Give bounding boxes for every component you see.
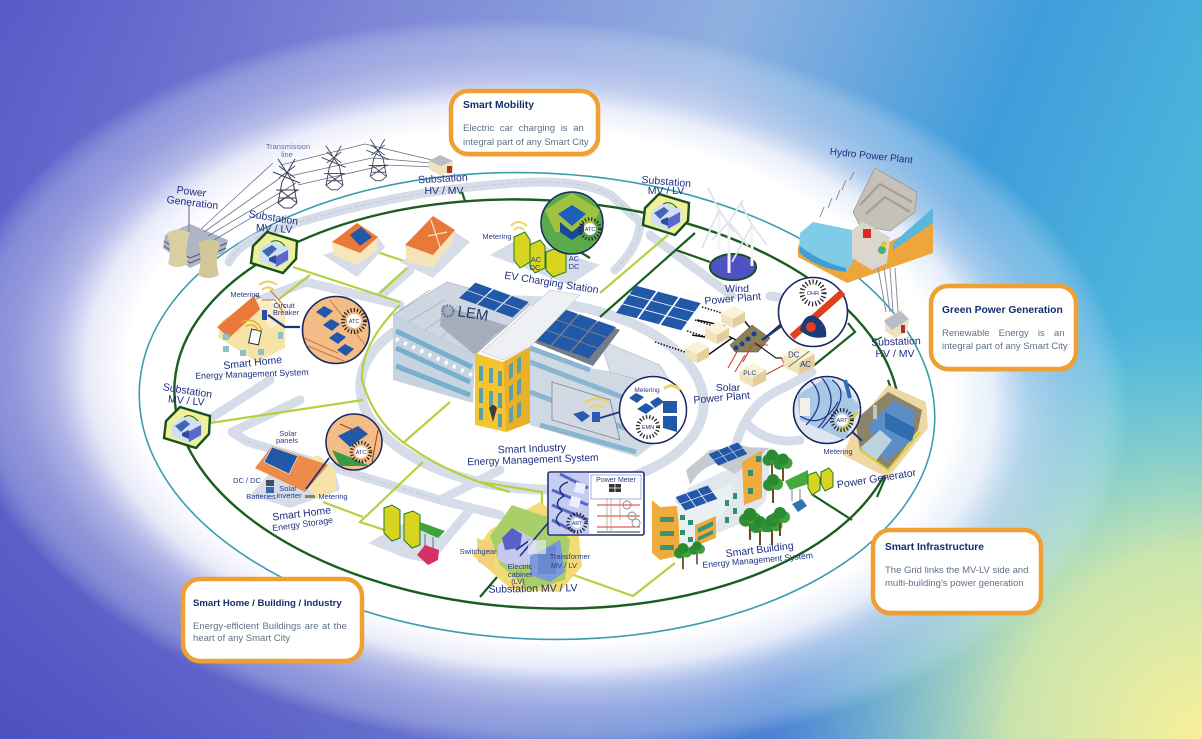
- icon: wind base: [710, 254, 756, 280]
- callout: smart home building industry: Smart Home / Building / Industry: [193, 598, 342, 609]
- label: storage parts: panels: [276, 436, 298, 445]
- left wing facade: [393, 315, 475, 403]
- label: storage parts: DC / DC: [233, 476, 262, 485]
- detail circle: ART generator: [794, 376, 860, 444]
- transmission lines and towers: [201, 139, 434, 240]
- right wing facade: [530, 345, 672, 457]
- hexagon substation top-left: [251, 232, 297, 273]
- icon: combiner box: [705, 322, 729, 344]
- roads network: [208, 182, 840, 555]
- label: metering and circuit breaker: Breaker: [273, 308, 300, 317]
- smart home EMS: [217, 282, 300, 362]
- callout: smart home building industry: [183, 579, 364, 664]
- power meter panel: [548, 472, 644, 535]
- label: EV metering and AC DC: DC: [530, 263, 541, 272]
- substation HV/MV top: [429, 155, 453, 176]
- label: substation HV/MV top: HV / MV: [424, 185, 464, 197]
- smart industry building LEM: [393, 282, 682, 457]
- callout: smart home building industry: heart of any Smart City: [193, 633, 290, 644]
- label: smart industry EMS: Energy Management System: [467, 453, 599, 468]
- label: metering and circuit breaker: [230, 290, 300, 317]
- label: substation equipment: [459, 547, 591, 586]
- medium voltage branch lines: [462, 192, 892, 597]
- label: transmission line: Transmission: [266, 142, 310, 151]
- label: substation HV/MV right: HV / MV: [875, 348, 915, 360]
- label: smart home energy storage: Energy Storage: [272, 515, 334, 533]
- label: storage parts: Metering: [318, 492, 348, 501]
- label: smart industry EMS: [467, 442, 599, 468]
- label: substation MV/LV left: Substation: [162, 381, 213, 401]
- detail circle: ATC storage: ATC: [356, 450, 366, 456]
- label: EV metering and AC DC: DC: [569, 262, 580, 271]
- wind power plant: [702, 188, 767, 280]
- solar plant wiring and boxes: [655, 306, 815, 387]
- label: storage parts: Solar: [279, 429, 297, 438]
- icon: pylon 1: [273, 159, 300, 208]
- callout: green power generation: Green Power Generation: [942, 305, 1063, 316]
- label: substation MV/LV left: MV / LV: [168, 393, 205, 409]
- concrete block: [852, 222, 890, 270]
- label: substation equipment: MV / LV: [551, 561, 577, 570]
- label: storage parts: Solar: [279, 484, 297, 493]
- label: metering and circuit breaker: Metering: [230, 290, 260, 299]
- label: smart home energy storage: [272, 504, 334, 533]
- label: power generation: Generation: [166, 194, 219, 212]
- detail circle: ATC home: ATC: [349, 319, 359, 325]
- callout: smart infrastructure: Smart Infrastructure: [885, 542, 984, 553]
- left roof: [393, 282, 530, 355]
- icon: cooling tower left: [167, 230, 190, 267]
- trees: [674, 450, 792, 569]
- icon: junction cabinet: [730, 325, 770, 352]
- label: substation equipment: Electric: [508, 562, 533, 571]
- callout: smart infrastructure: multi-building's power generation: [885, 578, 1024, 589]
- label: substation equipment: Switchgear: [459, 547, 497, 556]
- label: power generation: Power: [176, 184, 207, 200]
- smart building EMS: [652, 442, 792, 569]
- icon: DC/AC inverter: DC: [788, 351, 800, 360]
- detail circle: EMN: [620, 376, 686, 444]
- icon: roof solar upper: [709, 442, 747, 466]
- detail circle: ART generator: ART: [837, 418, 848, 424]
- label: substation HV/MV right: Substation: [871, 335, 921, 349]
- label: hydro power plant: Hydro Power Plant: [829, 147, 914, 166]
- label: substation MV/LV top-right: MV / LV: [648, 185, 684, 197]
- icon: PLC box: PLC: [743, 370, 756, 377]
- label: smart home EMS: Smart Home: [223, 354, 283, 372]
- label: storage parts: inverter: [276, 491, 302, 500]
- label: EV charging station: EV Charging Station: [504, 270, 600, 296]
- callout: smart mobility: [451, 91, 600, 157]
- label: EV metering and AC DC: Metering: [482, 232, 512, 241]
- label: power generation: [166, 184, 219, 212]
- label: solar power plant: Power Plant: [693, 390, 751, 406]
- icon: combiner box: [685, 341, 709, 363]
- label: solar power plant: [693, 382, 751, 406]
- detail circle: ATC EV: ATC: [585, 227, 595, 233]
- detail circle: ATC EV: [541, 192, 603, 254]
- callout: smart infrastructure: The Grid links the MV-LV side and: [885, 565, 1028, 576]
- callout: green power generation: Renewable Energy is an: [942, 328, 1064, 339]
- house with solar roof: [323, 223, 385, 277]
- EV charging station: [490, 222, 600, 285]
- callout: smart mobility: Electric car charging is an: [463, 123, 584, 134]
- callout: green power generation: integral part of any Smart City: [942, 341, 1068, 352]
- hexagon substation left: [164, 407, 210, 448]
- icon: PLC box: [740, 363, 766, 387]
- right roof solar panels: [533, 308, 620, 366]
- hexagon substation top-right: [643, 194, 689, 235]
- label: power generator: Power Generator: [836, 467, 917, 491]
- label: smart industry EMS: Smart Industry: [498, 442, 567, 456]
- label: substation MV/LV top-left: Substation: [248, 208, 299, 228]
- label: generator metering: Metering: [823, 447, 853, 456]
- house with wind turbine: [400, 216, 470, 278]
- detail circle: OHR: OHR: [807, 291, 819, 297]
- label: smart home energy storage: Smart Home: [272, 504, 332, 524]
- substation HV/MV right: [874, 310, 909, 341]
- EV charger lower-left: [368, 505, 450, 565]
- icon: pylon 3: [366, 139, 389, 181]
- dam: [853, 168, 917, 231]
- label: metering and circuit breaker: Circuit: [273, 301, 296, 310]
- icon: hydro base: [798, 222, 933, 283]
- label: wind power plant: Power Plant: [704, 291, 762, 307]
- label: EV metering and AC DC: AC: [531, 255, 542, 264]
- outer HV grid ring: [129, 156, 945, 656]
- icon: reservoir: [799, 222, 853, 272]
- label: EV metering and AC DC: AC: [569, 254, 580, 263]
- icon: roof solar lower: [676, 485, 717, 511]
- icon: combiner box: [721, 306, 745, 328]
- yellow tower: [475, 353, 506, 432]
- substation MV/LV bottom: [472, 502, 582, 592]
- detail circle: EMN: EMN: [642, 425, 654, 431]
- callout: smart mobility: integral part of any Smart City: [463, 137, 589, 148]
- icon: metering wifi: [573, 398, 620, 422]
- phase diagram: [597, 498, 640, 532]
- left roof solar panels: [459, 283, 529, 318]
- label: smart building EMS: [702, 540, 813, 570]
- icon: roof solar panel: [264, 447, 298, 474]
- EV charger right: [785, 468, 833, 512]
- power meter box: Power Meter: [596, 477, 637, 484]
- callout: smart home building industry: Energy-efficient Buildings are at the: [193, 621, 347, 632]
- label: substation MV/LV top-right: Substation: [641, 174, 692, 190]
- label: solar power plant: Solar: [716, 382, 741, 394]
- label: substation equipment: (LV): [511, 577, 525, 586]
- label: substation HV/MV right: [871, 335, 921, 360]
- detail circle: ATC storage: [326, 414, 382, 470]
- power generator: [842, 385, 928, 478]
- label: wind power plant: Wind: [725, 283, 749, 295]
- low voltage connection lines: [210, 235, 675, 596]
- label: smart building EMS: Energy Management System: [702, 550, 813, 570]
- power meter panel: ART: [572, 521, 582, 527]
- detail circle: OHR: [778, 278, 848, 346]
- label: substation HV/MV top: Substation: [418, 172, 468, 186]
- label: smart home EMS: Energy Management System: [195, 367, 309, 381]
- smart home energy storage: [250, 446, 340, 508]
- label: smart building EMS: Smart Building: [725, 540, 794, 560]
- callout: smart infrastructure: [873, 530, 1043, 616]
- solar power plant panels: [616, 286, 701, 330]
- icon: DC/AC inverter: AC: [800, 360, 811, 369]
- icon: DC/AC inverter: [783, 346, 815, 375]
- label: substation MV/LV top-left: MV / LV: [256, 222, 293, 236]
- label: substation HV/MV top: [418, 172, 468, 197]
- detail circle: EMN: Metering: [634, 387, 660, 394]
- inner MV grid ring: [164, 181, 910, 627]
- label: smart home EMS: [195, 354, 309, 381]
- label: storage parts: [233, 429, 348, 501]
- icon: pylon 2: [321, 146, 346, 190]
- label: substation equipment: cabinet: [508, 570, 533, 579]
- label: wind power plant: [704, 283, 762, 307]
- label: EV metering and AC DC: [482, 232, 580, 272]
- icon: wifi: [259, 282, 277, 290]
- detail circle: ATC home: [302, 296, 370, 364]
- label: storage parts: Batteries: [246, 492, 276, 501]
- callout: green power generation: [931, 286, 1078, 372]
- callout: smart mobility: Smart Mobility: [463, 100, 534, 111]
- icon: red car: [417, 545, 439, 565]
- label: transmission line: line: [281, 150, 293, 159]
- label: substation MV/LV bottom: Substation MV / LV: [488, 582, 578, 596]
- label: substation equipment: Transformer: [550, 552, 591, 561]
- hydro power plant: [798, 168, 933, 312]
- label: LEM logo: LEM: [456, 303, 489, 325]
- power generation plant: [163, 205, 228, 278]
- icon: cooling tower right: [198, 240, 221, 278]
- white central roof: [482, 290, 580, 360]
